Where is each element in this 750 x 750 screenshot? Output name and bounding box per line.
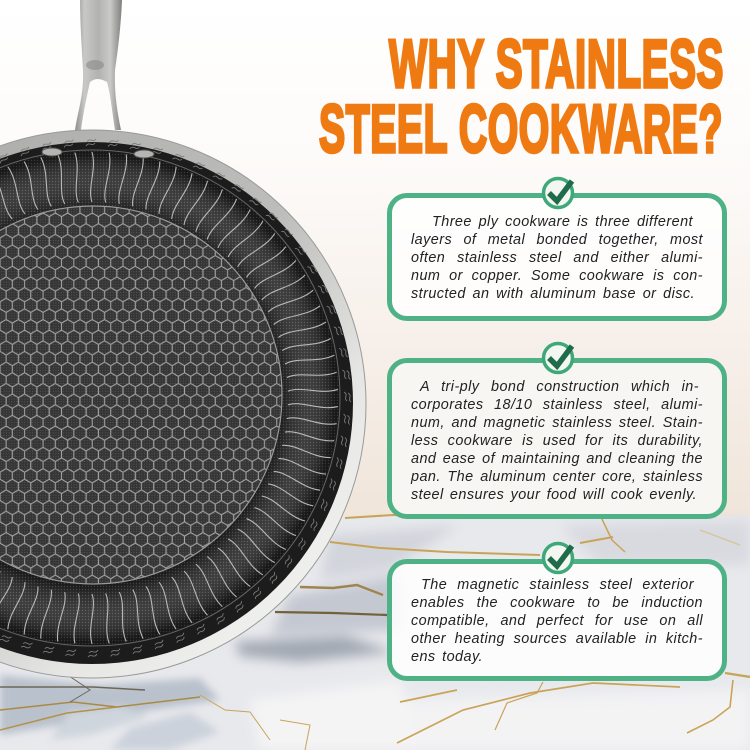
rivets <box>42 148 154 158</box>
textured outer band <box>0 151 339 645</box>
text block: other heating sources available in kitch- <box>411 631 703 647</box>
dark cooking surface <box>0 142 353 664</box>
text block: A tri-ply bond construction which in- <box>420 379 699 395</box>
icon: check badge <box>542 176 574 210</box>
text block: Three ply cookware is three different <box>432 214 693 230</box>
icon: check badge <box>542 542 574 574</box>
panel: three ply cookware <box>387 193 727 321</box>
text block <box>410 379 703 503</box>
curved ribs <box>0 116 362 679</box>
title <box>318 26 724 167</box>
outer decorative ring <box>0 102 375 693</box>
steel rim <box>0 130 366 678</box>
text block: num, and magnetic stainless steel. Stain- <box>411 415 703 431</box>
text block: less cookware is used for its durability, <box>411 433 703 449</box>
panel: tri-ply bond construction <box>387 358 727 519</box>
text block: corporates 18/10 stainless steel, alumi- <box>411 397 703 413</box>
pan handle <box>75 0 122 130</box>
icon: check badge <box>542 342 574 374</box>
text block: pan. The aluminum center core, stainless <box>411 469 703 485</box>
text block: layers of metal bonded together, most <box>411 232 703 248</box>
honeycomb centre <box>0 206 282 584</box>
text block: The magnetic stainless steel exterior <box>421 577 694 593</box>
text block: compatible, and perfect for use on all <box>411 613 703 629</box>
panel: magnetic exterior <box>387 559 727 681</box>
text block: often stainless steel and either alumi- <box>411 250 703 266</box>
text block: ens today. <box>411 649 483 665</box>
text block <box>411 214 703 302</box>
text block: num or copper. Some cookware is con- <box>411 268 703 284</box>
text block: structed an with aluminum base or disc. <box>411 286 695 302</box>
text block <box>411 577 703 665</box>
text block: enables the cookware to be induction <box>411 595 703 611</box>
text block: steel ensures your food will cook evenly. <box>411 487 697 503</box>
text block: and ease of maintaining and cleaning the <box>411 451 703 467</box>
